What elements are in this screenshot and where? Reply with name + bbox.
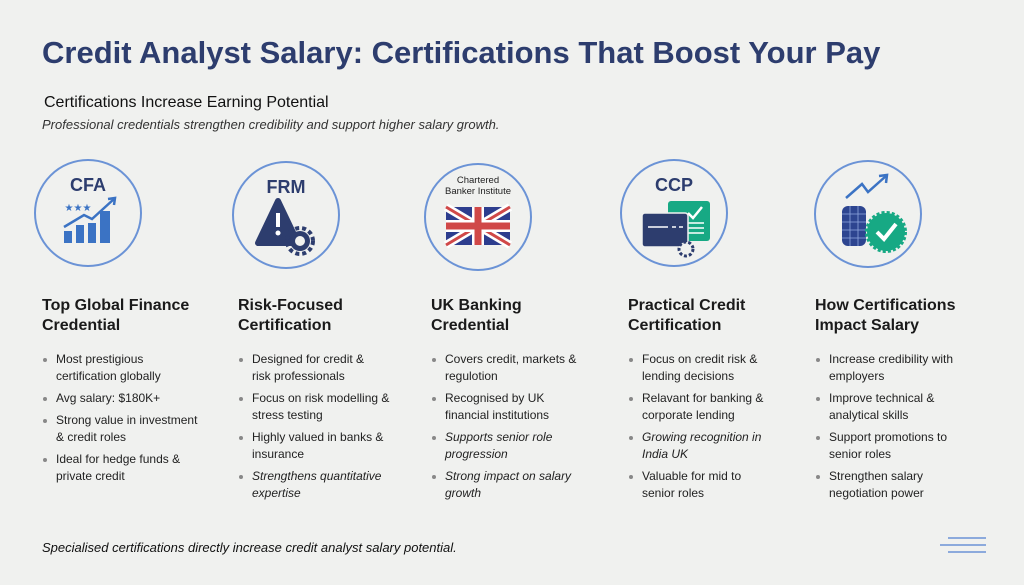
panel: UK Banking: financial institutions: [445, 408, 549, 422]
panel: impact: Support promotions to: [829, 430, 947, 444]
panel: FRM: risk professionals: [252, 369, 345, 383]
panel: CFA: Most prestigious: [56, 352, 143, 366]
icon: Chartered Banker Institute: [424, 163, 532, 271]
panel: impact: negotiation power: [829, 486, 924, 500]
panel: impact: senior roles: [829, 447, 891, 461]
panel: CCP: Focus on credit risk &: [642, 352, 757, 366]
panel: FRM: Risk-Focused: [238, 297, 343, 314]
panel: FRM: stress testing: [252, 408, 323, 422]
panel: UK Banking: Covers credit, markets &: [445, 352, 576, 366]
panel: CCP: lending decisions: [642, 369, 734, 383]
panel: CCP: Practical Credit: [628, 297, 745, 314]
panel: FRM: Strengthens quantitative: [252, 469, 381, 483]
panel: CCP: India UK: [642, 447, 688, 461]
panel: impact: How Certifications: [815, 297, 955, 314]
panel: UK Banking: Strong impact on salary: [445, 469, 571, 483]
subtitle heading: Certifications Increase Earning Potential: [44, 94, 329, 111]
panel: UK Banking: Credential: [431, 317, 509, 334]
panel: FRM: Certification: [238, 317, 331, 334]
panel: UK Banking: regulotion: [445, 369, 498, 383]
icon: CFA: [34, 159, 142, 267]
panel: UK Banking: growth: [445, 486, 481, 500]
panel: FRM: Designed for credit &: [252, 352, 364, 366]
icon: salary growth: [814, 160, 922, 268]
panel: CFA: Credential: [42, 317, 120, 334]
panel: impact: Improve technical &: [829, 391, 934, 405]
icon: Chartered Banker Institute: Chartered: [457, 175, 499, 186]
icon: Chartered Banker Institute: Banker Institute: [445, 186, 511, 197]
panel: CCP: senior roles: [642, 486, 704, 500]
panel: impact: Impact Salary: [815, 317, 919, 334]
panel: FRM: insurance: [252, 447, 304, 461]
footer note: Specialised certifications directly increase credit analyst salary potential.: [42, 540, 457, 555]
panel: CFA: Ideal for hedge funds &: [56, 452, 180, 466]
panel: FRM: Focus on risk modelling &: [252, 391, 389, 405]
panel: CCP: Valuable for mid to: [642, 469, 741, 483]
icon: CCP: CCP: [655, 175, 693, 195]
panel: impact: Increase credibility with: [829, 352, 953, 366]
panel: CFA: Avg salary: $180K+: [56, 391, 160, 405]
panel: UK Banking: progression: [445, 447, 508, 461]
icon: CFA: CFA: [70, 175, 106, 195]
icon: FRM: FRM: [266, 177, 306, 197]
panel: CFA: Strong value in investment: [56, 413, 197, 427]
panel: CCP: Relavant for banking &: [642, 391, 763, 405]
icon: decorative lines: [940, 537, 986, 553]
panel: CCP: Certification: [628, 317, 721, 334]
panel: FRM: expertise: [252, 486, 301, 500]
panel: impact: analytical skills: [829, 408, 908, 422]
panel: UK Banking: Supports senior role: [445, 430, 552, 444]
icon: CFA: ★★★: [65, 203, 91, 214]
icon: FRM: [232, 161, 340, 269]
panel: CCP: corporate lending: [642, 408, 735, 422]
panel: CFA: Top Global Finance: [42, 297, 189, 314]
panel: FRM: [238, 297, 390, 500]
panel: CFA: certification globally: [56, 369, 161, 383]
panel: CFA: [42, 297, 198, 483]
panel: FRM: Highly valued in banks &: [252, 430, 383, 444]
panel: impact: employers: [829, 369, 884, 383]
title: Credit Analyst Salary: Certifications That Boost Your Pay: [42, 35, 880, 70]
icon: CCP: [620, 159, 728, 267]
subtitle description: Professional credentials strengthen credibility and support higher salary growth.: [42, 117, 499, 132]
panel: UK Banking: [431, 297, 576, 500]
panel: UK Banking: Recognised by UK: [445, 391, 544, 405]
panel: impact: [815, 297, 955, 500]
panel: CCP: Growing recognition in: [642, 430, 761, 444]
panel: UK Banking: UK Banking: [431, 297, 522, 314]
panel: impact: Strengthen salary: [829, 469, 923, 483]
panel: CCP: [628, 297, 764, 500]
panel: CFA: private credit: [56, 469, 125, 483]
panel: CFA: & credit roles: [56, 430, 126, 444]
